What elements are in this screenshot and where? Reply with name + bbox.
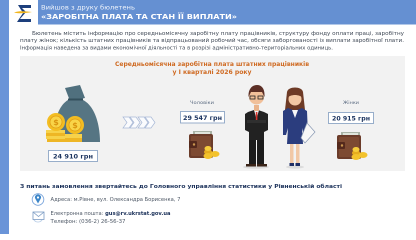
panel title: Середньомісячна заробітна плата штатних працівників (115, 61, 309, 68)
icon: money bag with coins: $ (72, 121, 78, 130)
email: Електронна пошта: gus@rv.ukrstat.gov.ua (50, 211, 170, 217)
phone: Телефон: (036-2) 26-56-37 (49, 219, 126, 225)
intro paragraph (20, 31, 404, 52)
total value box (48, 150, 98, 162)
total value box: 24 910 грн (53, 154, 93, 160)
men label: Чоловіки (190, 100, 214, 106)
left blue strip (0, 0, 9, 234)
panel: average salary (20, 56, 405, 171)
icon: sigma logo (14, 5, 32, 22)
header kicker: Вийшов з друку бюлетень (41, 4, 136, 11)
arrow: chevrons (123, 117, 155, 128)
figure: man (243, 85, 269, 169)
men value box: 29 547 грн (183, 116, 222, 122)
intro paragraph: Інформація наведена за видами економічної діяльності та в розрізі адміністративно-територіальних одиниць. (20, 46, 333, 52)
intro paragraph: Бюлетень містить інформацію про середньомісячну заробітну плату працівників, структуру фонду оплати праці, заробітну (32, 31, 404, 37)
women value box: 20 915 грн (332, 116, 370, 122)
panel title: у I кварталі 2026 року (172, 70, 252, 76)
icon: money bag with coins (46, 85, 100, 142)
icon: mail (33, 212, 44, 222)
men value box (180, 112, 224, 123)
intro paragraph: плату жінок; кількість штатних працівників та відпрацьований робочий час, обсяги заборгованості із виплати заробітної плати. (20, 37, 404, 44)
address: Адреса: м.Рівне, вул. Олександра Борисенка, 7 (50, 197, 180, 203)
figure: woman (283, 88, 315, 169)
women label: Жінки (343, 100, 359, 106)
icon: women wallet (337, 132, 368, 160)
header band (38, 0, 416, 24)
icon: money bag with coins: $ (53, 118, 59, 127)
icon: men wallet (189, 131, 220, 159)
panel title (115, 61, 309, 76)
women value box (328, 112, 374, 124)
contact heading: З питань замовлення звертайтесь до Головного управління статистики у Рівненській області (20, 183, 342, 190)
icon: location (32, 194, 44, 205)
header title: «ЗАРОБІТНА ПЛАТА ТА СТАН ЇЇ ВИПЛАТИ» (41, 12, 237, 21)
